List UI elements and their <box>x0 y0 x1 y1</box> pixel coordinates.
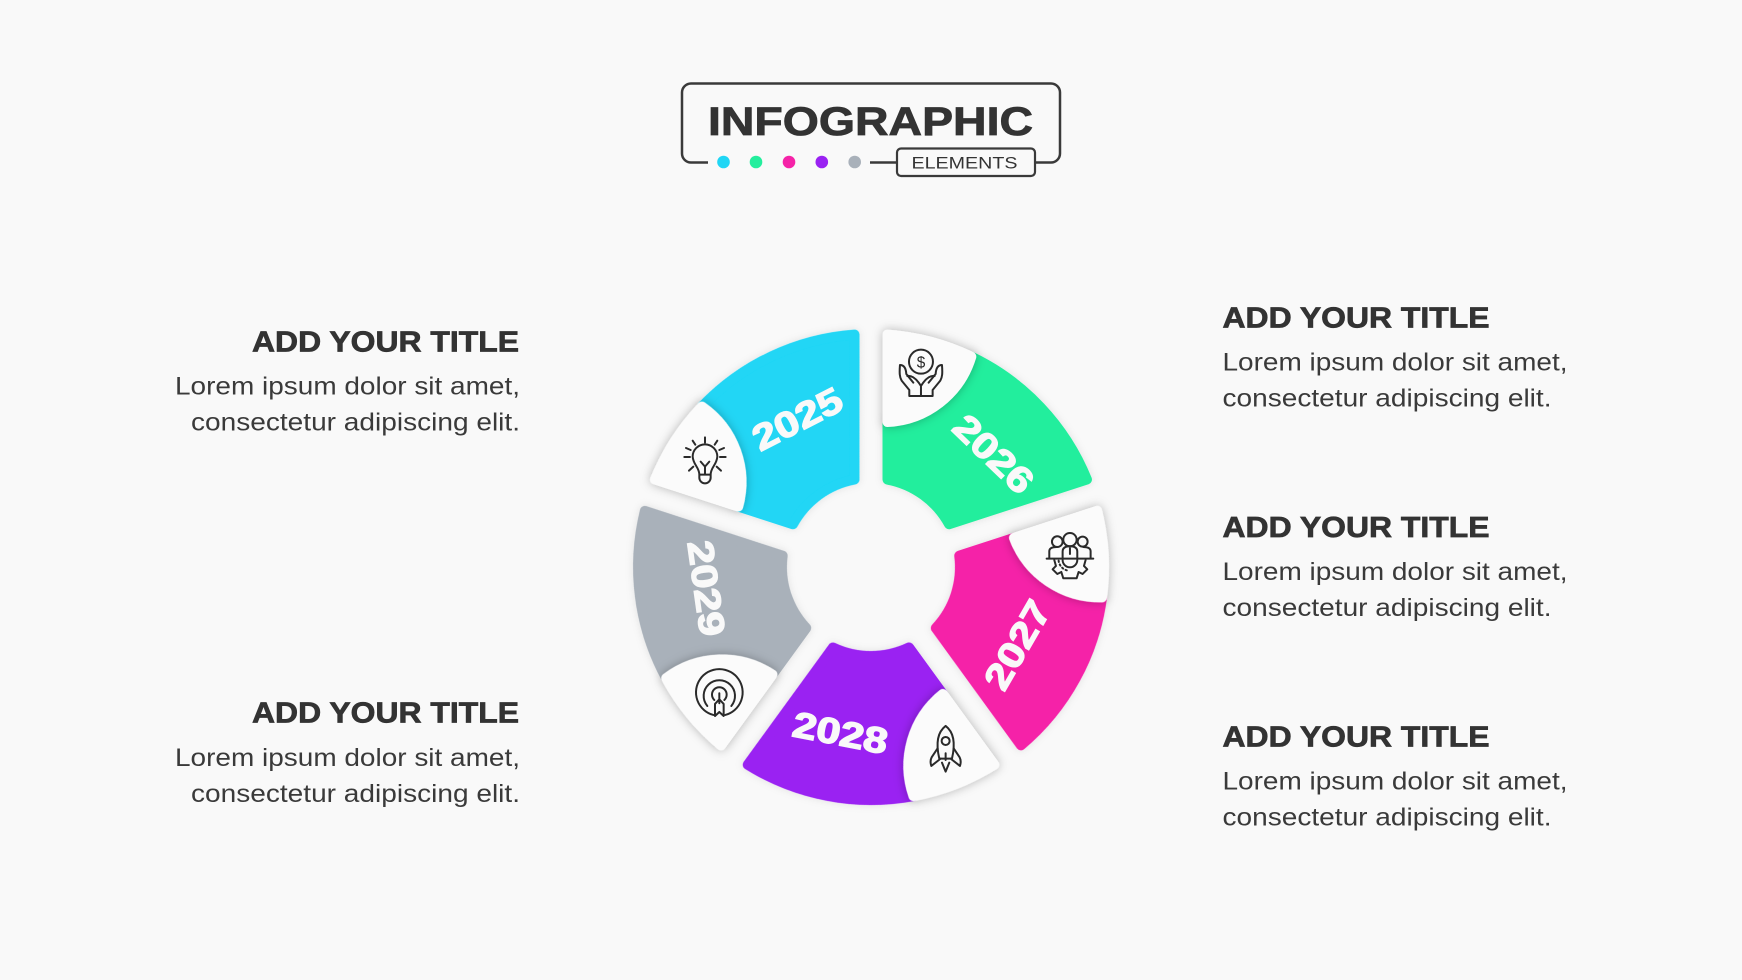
text block: left bottom <box>175 698 520 808</box>
text block: right middle: Lorem ipsum dolor sit amet, <box>1222 558 1568 586</box>
segment 2025 <box>655 290 897 538</box>
segment 2026 <box>888 335 1087 524</box>
year 2026: 2026 <box>945 406 1042 502</box>
icon: team with gear <box>1047 533 1093 578</box>
year 2029: 2029 <box>679 538 733 639</box>
text block: right middle <box>1222 512 1568 622</box>
text block: right top <box>1222 302 1568 412</box>
icon: money in hands: $ <box>917 354 926 371</box>
text block: right middle: consectetur adipiscing elit. <box>1222 594 1552 622</box>
title text: INFOGRAPHIC <box>708 100 1033 144</box>
text block: right bottom: Lorem ipsum dolor sit amet, <box>1222 768 1568 796</box>
elements subtitle: ELEMENTS <box>912 153 1018 172</box>
year 2025: 2025 <box>745 379 849 459</box>
text block: left top: consectetur adipiscing elit. <box>191 408 520 436</box>
colour dots <box>717 156 861 168</box>
segment 2028 <box>721 611 994 882</box>
elements subtitle <box>897 148 1035 176</box>
title badge <box>682 84 1060 176</box>
year 2028: 2028 <box>789 703 891 762</box>
text block: right bottom: ADD YOUR TITLE <box>1222 722 1490 754</box>
text block: right middle: ADD YOUR TITLE <box>1222 512 1490 544</box>
text block: left top <box>175 326 520 436</box>
icon: rocket <box>931 726 961 772</box>
text block: left bottom: Lorem ipsum dolor sit amet, <box>175 744 520 772</box>
icon: money in hands <box>900 350 942 396</box>
segment 2029 <box>560 475 833 745</box>
text block: right bottom <box>1222 722 1568 832</box>
text block: left top: Lorem ipsum dolor sit amet, <box>175 372 520 400</box>
text block: left top: ADD YOUR TITLE <box>252 326 519 358</box>
year 2027: 2027 <box>975 593 1059 697</box>
segment 2027 <box>917 511 1159 759</box>
text block: right bottom: consectetur adipiscing elit. <box>1222 804 1552 832</box>
icon: target with arrow <box>696 669 743 716</box>
text block: left bottom: ADD YOUR TITLE <box>252 698 519 730</box>
text block: right top: Lorem ipsum dolor sit amet, <box>1222 348 1568 376</box>
text block: right top: ADD YOUR TITLE <box>1222 302 1490 334</box>
text block: right top: consectetur adipiscing elit. <box>1222 384 1552 412</box>
icon: light bulb <box>684 437 726 483</box>
text block: left bottom: consectetur adipiscing elit. <box>191 780 520 808</box>
